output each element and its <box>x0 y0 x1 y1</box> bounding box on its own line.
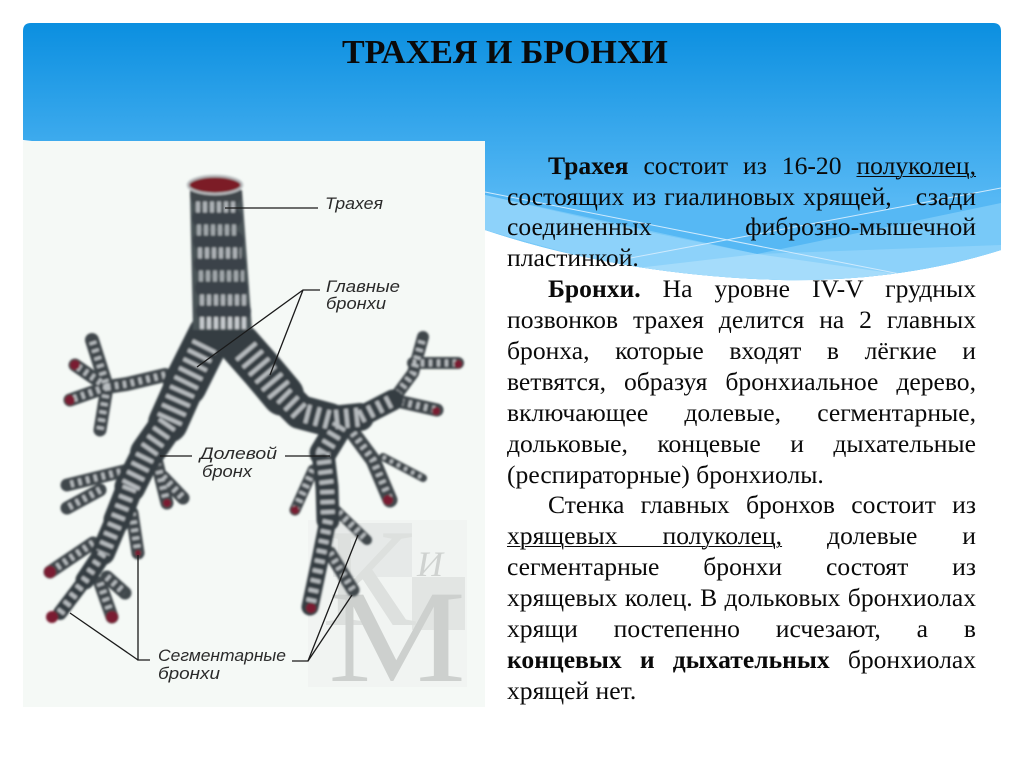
watermark: К и М: М <box>328 563 466 710</box>
text block: description of trachea and bronchi <box>507 151 976 705</box>
figure labels: Трахея <box>325 194 383 213</box>
text block: description of trachea and bronchi: позвонков трахея делится на 2 главных <box>507 305 976 334</box>
small branches: stripes <box>50 337 458 617</box>
text block: description of trachea and bronchi: сегментарные бронхи состоят из <box>507 552 976 581</box>
text block: description of trachea and bronchi: хрящевых колец. В дольковых бронхиолах <box>507 583 976 612</box>
figure labels: Сегментарные <box>158 646 286 665</box>
figure labels: бронх <box>202 462 253 481</box>
text block: description of trachea and bronchi: включающее долевые, сегментарные, <box>507 398 976 427</box>
text block: description of trachea and bronchi: дольковые, концевые и дыхательные <box>507 429 976 458</box>
background: blue header panel with waves <box>23 23 1001 280</box>
left main bronchus <box>60 335 210 613</box>
figure labels: бронхи <box>326 294 387 313</box>
right main bronchus <box>240 345 393 607</box>
text block: description of trachea and bronchi: бронха, которые входят в лёгкие и <box>507 336 976 365</box>
text block: description of trachea and bronchi: (респираторные) бронхиолы. <box>507 460 824 489</box>
figure labels: Долевой <box>198 444 278 463</box>
text block: description of trachea and bronchi: хрящевых полуколец, долевые и <box>507 521 976 550</box>
text block: description of trachea and bronchi: пластинкой. <box>507 243 639 272</box>
text block: description of trachea and bronchi: хрящей нет. <box>507 676 636 705</box>
red bronchial tips <box>44 360 462 623</box>
watermark: К и М <box>308 501 467 710</box>
watermark: К и М: И <box>416 544 445 584</box>
trachea body and rings <box>190 190 252 330</box>
watermark: К и М: К <box>322 501 416 656</box>
figure labels: Главные <box>326 277 400 296</box>
text block: description of trachea and bronchi: хрящи постепенно исчезают, а в <box>507 614 976 643</box>
leader lines <box>70 208 358 661</box>
text block: description of trachea and bronchi: Трахея состоит из 16-20 полуколец, <box>548 151 976 180</box>
panel: anatomical illustration of trachea and bronchi <box>23 141 485 707</box>
text block: description of trachea and bronchi: состоящих из гиалиновых хрящей, сзади <box>507 182 976 211</box>
figure labels: бронхи <box>158 664 221 683</box>
trachea opening <box>188 176 242 194</box>
trachea and bronchial tree <box>44 176 462 623</box>
small branches: base <box>50 337 458 617</box>
text block: description of trachea and bronchi: концевых и дыхательных бронхиолах <box>507 645 976 674</box>
text block: description of trachea and bronchi: ветвятся, образуя бронхиальное дерево, <box>507 367 976 396</box>
title: ТРАХЕЯ И БРОНХИ <box>342 34 668 71</box>
text block: description of trachea and bronchi: соединенных фиброзно-мышечной <box>507 212 976 241</box>
text block: description of trachea and bronchi: Стенка главных бронхов состоит из <box>548 490 976 519</box>
text block: description of trachea and bronchi: Бронхи. На уровне IV-V грудных <box>548 274 976 303</box>
figure labels <box>158 194 400 683</box>
